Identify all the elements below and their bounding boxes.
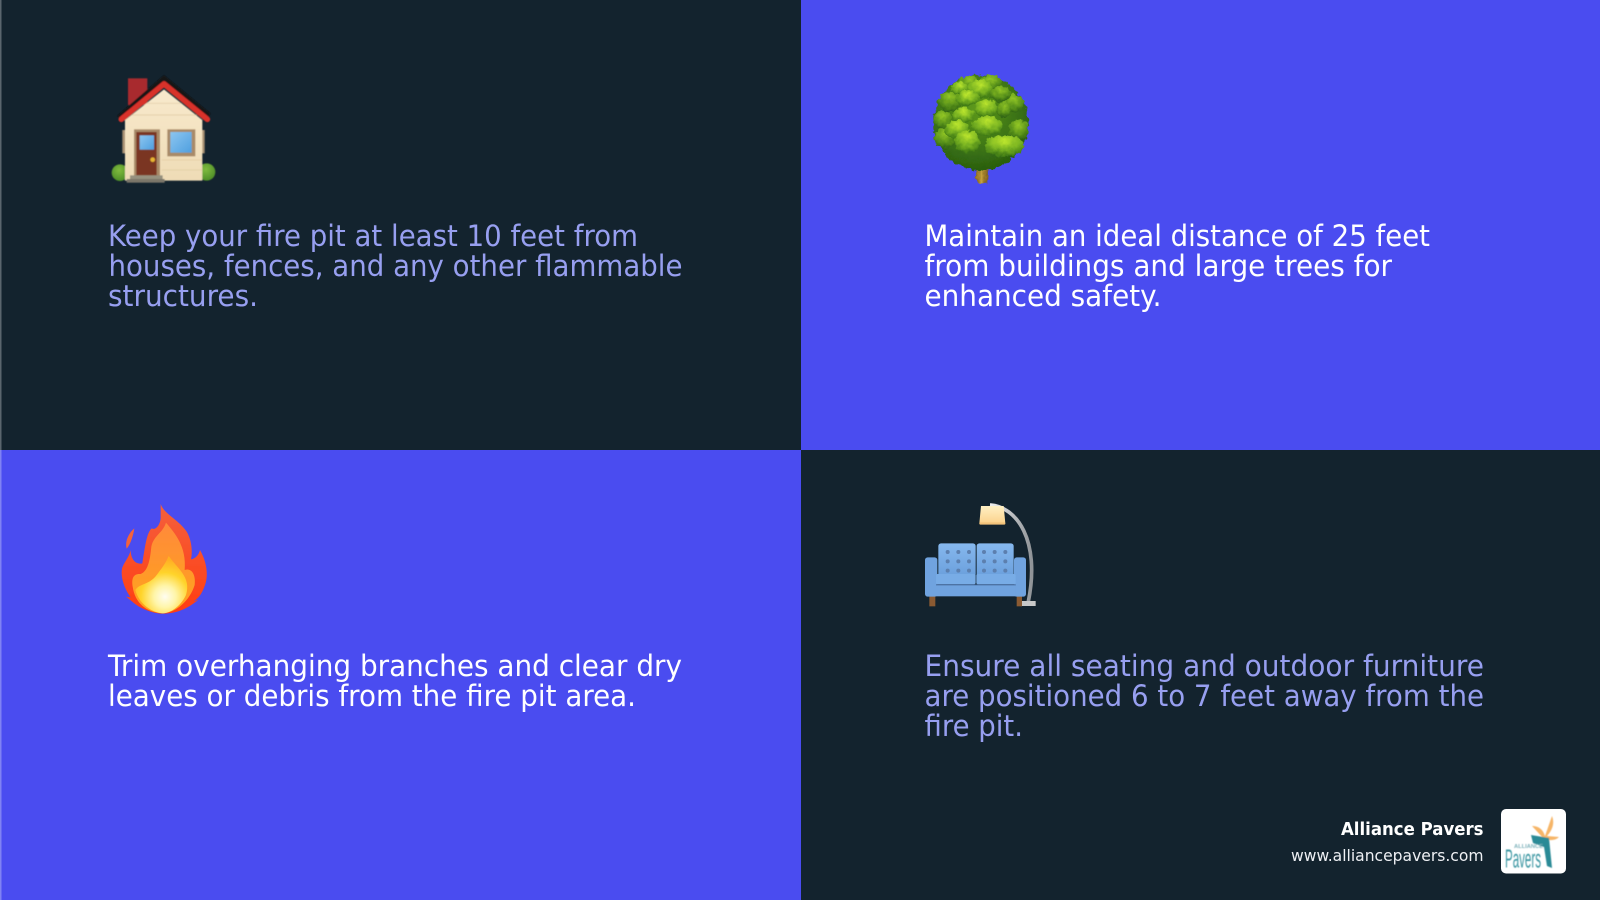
text block: furniture distance: fire pit.	[924, 709, 1023, 743]
logo: Pavers	[1505, 844, 1541, 874]
text block: furniture distance: Ensure all seating and outdoor furniture	[924, 649, 1484, 683]
text block: clear debris	[107, 649, 682, 713]
text block: house distance: structures.	[108, 279, 258, 313]
brand name: Alliance Pavers	[1341, 820, 1484, 840]
text block: furniture distance	[924, 649, 1484, 743]
text block: house distance: houses, fences, and any other flammable	[108, 249, 682, 283]
icon: tree	[933, 75, 1028, 183]
text block: tree distance: Maintain an ideal distance of 25 feet	[924, 219, 1430, 253]
text block: clear debris: Trim overhanging branches and clear dry	[107, 649, 682, 683]
panel: top right background	[801, 0, 1600, 450]
text block: furniture distance: are positioned 6 to 7 feet away from the	[924, 679, 1484, 713]
panel: bottom left background	[0, 450, 801, 900]
panel: top left background	[0, 0, 801, 450]
brand url: www.alliancepavers.com	[1291, 846, 1484, 865]
text block: tree distance: enhanced safety.	[924, 279, 1162, 313]
text block: tree distance: from buildings and large trees for	[924, 249, 1393, 283]
icon: sofa and lamp	[925, 505, 1036, 606]
text block: clear debris: leaves or debris from the fire pit area.	[108, 679, 636, 713]
logo	[1501, 809, 1566, 874]
text block: house distance: Keep your fire pit at least 10 feet from	[108, 219, 638, 253]
logo: ALLIANCE	[1514, 844, 1543, 850]
text block: tree distance	[924, 219, 1430, 313]
panel: bottom right background	[801, 450, 1600, 900]
text block: house distance	[108, 219, 682, 313]
icon: house	[112, 78, 215, 183]
icon: fire	[122, 504, 207, 614]
